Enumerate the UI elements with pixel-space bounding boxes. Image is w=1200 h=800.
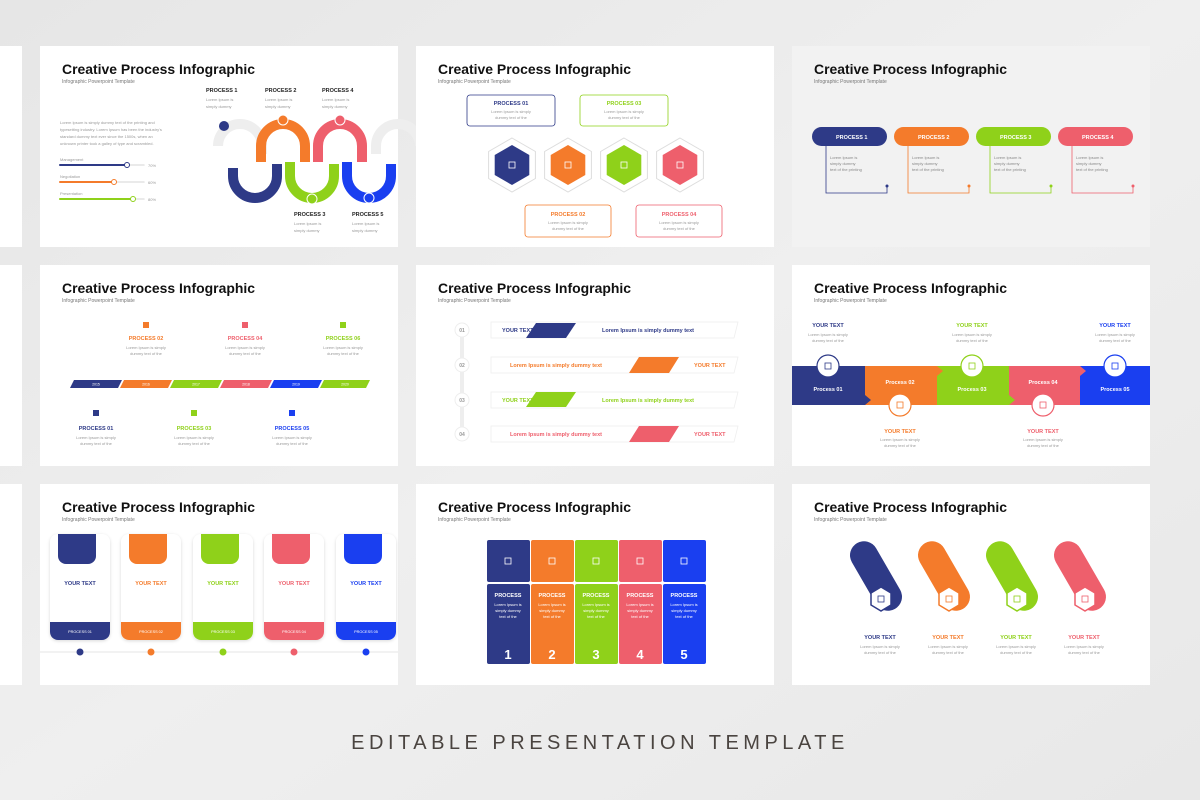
slide 3: process tabs: text of the printing xyxy=(912,167,944,172)
slide 8: puzzle: text of the xyxy=(675,614,694,619)
slide 6: arrow band: Process 02 xyxy=(885,380,915,386)
slide 8: puzzle: simply dummy xyxy=(539,608,565,613)
slide 2: hexagons: dummy text of the xyxy=(608,115,641,120)
slide 2: hexagons: Creative Process Infographic xyxy=(438,61,631,77)
slide 3: process tabs: PROCESS 2 xyxy=(918,135,949,141)
partial slides at left edge xyxy=(0,46,22,685)
slide 4: timeline bars: 2018 xyxy=(242,382,250,386)
slide 8: puzzle xyxy=(416,484,774,685)
slide 1: ring process: simply dummy xyxy=(294,228,320,233)
slide 7: cards: YOUR TEXT xyxy=(135,581,167,587)
slide 4: timeline bars xyxy=(40,265,398,466)
slide 7: cards: PROCESS 02 xyxy=(139,630,163,634)
slide 2: hexagons: Lorem Ipsum is simply xyxy=(548,220,588,225)
slide 7: cards: YOUR TEXT xyxy=(278,581,310,587)
slide 3: process tabs: text of the printing xyxy=(1076,167,1108,172)
slide 3: process tabs: Infographic Powerpoint Template xyxy=(814,79,887,85)
slide 4: timeline bars: dummy text of the xyxy=(80,441,113,446)
slide 8: puzzle: 4 xyxy=(636,647,644,662)
slide 4: timeline bars: 2019 xyxy=(292,382,300,386)
slide 8: puzzle: Lorem Ipsum is xyxy=(582,602,610,607)
slide 6: arrow band: Lorem Ipsum is simply xyxy=(808,332,848,337)
slide 8: puzzle: 5 xyxy=(680,647,688,662)
slide 8: puzzle: Creative Process Infographic xyxy=(438,499,631,515)
slide 8: puzzle: simply dummy xyxy=(627,608,653,613)
slide 1: ring process: simply dummy xyxy=(322,104,348,109)
slide 2: hexagons: dummy text of the xyxy=(663,226,696,231)
slide 8: puzzle: text of the xyxy=(499,614,518,619)
slide 4: timeline bars: PROCESS 06 xyxy=(326,336,360,342)
slide 4: timeline bars: Lorem Ipsum is simply xyxy=(76,435,116,440)
slide 4: timeline bars: 2017 xyxy=(192,382,200,386)
slide 3: process tabs: simply dummy xyxy=(912,161,938,166)
slide 1: ring process: Infographic Powerpoint Template xyxy=(62,79,135,85)
slide 1: ring process: Lorem Ipsum is xyxy=(322,97,349,102)
slide 4: timeline bars: PROCESS 04 xyxy=(228,336,263,342)
slide 3: process tabs: PROCESS 4 xyxy=(1082,135,1114,141)
slide 1: ring process: simply dummy xyxy=(206,104,232,109)
slide 4: timeline bars: Infographic Powerpoint Template xyxy=(62,298,135,304)
slide 4: timeline bars: dummy text of the xyxy=(327,351,360,356)
slide 6: arrow band: YOUR TEXT xyxy=(1027,429,1059,435)
slide 8: puzzle: simply dummy xyxy=(495,608,521,613)
slide 4: timeline bars: Lorem Ipsum is simply xyxy=(272,435,312,440)
slide 7: cards: Infographic Powerpoint Template xyxy=(62,517,135,523)
slide 2: hexagons: Lorem Ipsum is simply xyxy=(604,109,644,114)
slide 8: puzzle: simply dummy xyxy=(671,608,697,613)
slide 1: ring process: Lorem Ipsum is simply dummy text of the printing and xyxy=(60,120,155,125)
slide 6: arrow band: YOUR TEXT xyxy=(956,323,988,329)
slide 3: process tabs: PROCESS 3 xyxy=(1000,135,1031,141)
slide 1: ring process: simply dummy xyxy=(352,228,378,233)
slide 6: arrow band: Process 05 xyxy=(1100,387,1130,393)
slide 6: arrow band: Infographic Powerpoint Template xyxy=(814,298,887,304)
slide 1: ring process: PROCESS 5 xyxy=(352,212,383,218)
slide 8: puzzle: PROCESS xyxy=(495,593,522,599)
slide 4: timeline bars: dummy text of the xyxy=(130,351,163,356)
slide 5: rows list: Lorem Ipsum is simply dummy text xyxy=(602,398,694,404)
slide 5: rows list: 01 xyxy=(459,328,465,334)
slide 8: puzzle: Lorem Ipsum is xyxy=(538,602,566,607)
slide 6: arrow band: YOUR TEXT xyxy=(1099,323,1131,329)
slide 6: arrow band: Creative Process Infographic xyxy=(814,280,1007,296)
slide 8: puzzle: PROCESS xyxy=(539,593,566,599)
slide 7: cards: Creative Process Infographic xyxy=(62,499,255,515)
slide 9: tilted pills: dummy text of the xyxy=(1068,650,1101,655)
slide 2: hexagons: dummy text of the xyxy=(552,226,585,231)
slide 8: puzzle: PROCESS xyxy=(583,593,610,599)
slide 8: puzzle: 2 xyxy=(548,647,556,662)
slide 1: ring process: PROCESS 3 xyxy=(294,212,325,218)
slide 4: timeline bars: Lorem Ipsum is simply xyxy=(225,345,265,350)
slide 5: rows list: 04 xyxy=(459,432,465,438)
slide 2: hexagons: Lorem Ipsum is simply xyxy=(491,109,531,114)
slide 3: process tabs: simply dummy xyxy=(994,161,1020,166)
slide 8: puzzle: Lorem Ipsum is xyxy=(626,602,654,607)
slide 1: ring process: PROCESS 1 xyxy=(206,88,237,94)
slide 4: timeline bars: 2015 xyxy=(92,382,100,386)
slide 4: timeline bars: Creative Process Infographic xyxy=(62,280,255,296)
slide 9: tilted pills: YOUR TEXT xyxy=(1068,635,1100,641)
slide 3: process tabs: Lorem Ipsum is xyxy=(994,155,1021,160)
slide 8: puzzle: text of the xyxy=(587,614,606,619)
slide 9: tilted pills: dummy text of the xyxy=(1000,650,1033,655)
slide 9: tilted pills xyxy=(792,484,1150,685)
slide 7: cards: PROCESS 05 xyxy=(354,630,378,634)
slide 6: arrow band: Process 03 xyxy=(957,387,987,393)
slide 4: timeline bars: 2016 xyxy=(142,382,150,386)
slide 5: rows list: 03 xyxy=(459,398,465,404)
slide 2: hexagons: PROCESS 02 xyxy=(551,212,585,218)
slide 1: ring process: Creative Process Infographic xyxy=(62,61,255,77)
slide 6: arrow band: YOUR TEXT xyxy=(812,323,844,329)
slide 2: hexagons: Infographic Powerpoint Template xyxy=(438,79,511,85)
slide 2: hexagons: PROCESS 04 xyxy=(662,212,697,218)
slide 3: process tabs: Lorem Ipsum is xyxy=(1076,155,1103,160)
slide 6: arrow band: dummy text of the xyxy=(1027,443,1060,448)
slide 2: hexagons xyxy=(416,46,774,247)
slide 9: tilted pills: Creative Process Infographic xyxy=(814,499,1007,515)
slide 1: ring process: Presentation xyxy=(60,191,82,196)
slide 8: puzzle: Infographic Powerpoint Template xyxy=(438,517,511,523)
slide 1: ring process: Lorem Ipsum is xyxy=(294,221,321,226)
slide 1: ring process: typesetting industry. Lorem Ipsum has been the industry's xyxy=(60,127,162,132)
slide 5: rows list: Creative Process Infographic xyxy=(438,280,631,296)
footer heading: EDITABLE PRESENTATION TEMPLATE xyxy=(351,732,849,754)
slide 8: puzzle: text of the xyxy=(631,614,650,619)
slide 1: ring process: 80% xyxy=(148,197,156,202)
slide 1: ring process: 70% xyxy=(148,163,156,168)
slide 7: cards: YOUR TEXT xyxy=(64,581,96,587)
slide 4: timeline bars: Lorem Ipsum is simply xyxy=(323,345,363,350)
slide 9: tilted pills: Lorem Ipsum is simply xyxy=(860,644,900,649)
slide 3: process tabs: simply dummy xyxy=(830,161,856,166)
slide 2: hexagons: PROCESS 03 xyxy=(607,101,641,107)
slide 9: tilted pills: dummy text of the xyxy=(932,650,965,655)
slide 5: rows list: YOUR TEXT xyxy=(694,432,726,438)
slide 2: hexagons: PROCESS 01 xyxy=(494,101,528,107)
slide 3: process tabs: Creative Process Infographic xyxy=(814,61,1007,77)
slide 1: ring process: PROCESS 4 xyxy=(322,88,354,94)
slide 5: rows list: YOUR TEXT xyxy=(694,363,726,369)
slide 5: rows list: YOUR TEXT xyxy=(502,398,534,404)
slide 9: tilted pills: YOUR TEXT xyxy=(864,635,896,641)
slide 6: arrow band: Lorem Ipsum is simply xyxy=(880,437,920,442)
slide 6: arrow band: YOUR TEXT xyxy=(884,429,916,435)
slide 4: timeline bars: dummy text of the xyxy=(229,351,262,356)
slide 4: timeline bars: PROCESS 02 xyxy=(129,336,163,342)
slide 6: arrow band xyxy=(792,265,1150,466)
slide 8: puzzle: simply dummy xyxy=(583,608,609,613)
slide 5: rows list: Lorem Ipsum is simply dummy text xyxy=(510,363,602,369)
slide 1: ring process: standard dummy text ever since the 1500s, when an xyxy=(60,134,153,139)
slide 9: tilted pills: YOUR TEXT xyxy=(932,635,964,641)
slide 6: arrow band: Lorem Ipsum is simply xyxy=(1023,437,1063,442)
slide 1: ring process: 60% xyxy=(148,180,156,185)
slide 6: arrow band: dummy text of the xyxy=(1099,338,1132,343)
slide 5: rows list xyxy=(416,265,774,466)
slide 4: timeline bars: dummy text of the xyxy=(178,441,211,446)
slide 7: cards: PROCESS 04 xyxy=(282,630,306,634)
slide 6: arrow band: Lorem Ipsum is simply xyxy=(1095,332,1135,337)
slide 4: timeline bars: dummy text of the xyxy=(276,441,309,446)
slide 4: timeline bars: PROCESS 05 xyxy=(275,426,309,432)
slide 9: tilted pills: YOUR TEXT xyxy=(1000,635,1032,641)
slide 1: ring process: Management xyxy=(60,157,84,162)
slide 6: arrow band: Lorem Ipsum is simply xyxy=(952,332,992,337)
slide 3: process tabs: PROCESS 1 xyxy=(836,135,867,141)
slide 8: puzzle: PROCESS xyxy=(627,593,654,599)
slide 8: puzzle: 3 xyxy=(592,647,600,662)
slide 4: timeline bars: PROCESS 01 xyxy=(79,426,113,432)
slide 9: tilted pills: Lorem Ipsum is simply xyxy=(928,644,968,649)
slide 1: ring process: Lorem Ipsum is xyxy=(352,221,379,226)
slide 9: tilted pills: dummy text of the xyxy=(864,650,897,655)
slide 8: puzzle: Lorem Ipsum is xyxy=(494,602,522,607)
slide 2: hexagons: Lorem Ipsum is simply xyxy=(659,220,699,225)
slide 5: rows list: Infographic Powerpoint Template xyxy=(438,298,511,304)
slide 5: rows list: Lorem Ipsum is simply dummy text xyxy=(510,432,602,438)
slide 1: ring process: Lorem Ipsum is xyxy=(265,97,292,102)
slide 7: cards: PROCESS 03 xyxy=(211,630,235,634)
slide 7: cards: YOUR TEXT xyxy=(207,581,239,587)
slide 2: hexagons: dummy text of the xyxy=(495,115,528,120)
slide 1: ring process: Lorem Ipsum is xyxy=(206,97,233,102)
slide 3: process tabs: Lorem Ipsum is xyxy=(830,155,857,160)
slide 8: puzzle: 1 xyxy=(504,647,512,662)
slide 7: cards: PROCESS 01 xyxy=(68,630,92,634)
slide 1: ring process: simply dummy xyxy=(265,104,291,109)
slide 1: ring process: unknown printer took a galley of type and scrambled. xyxy=(60,141,154,146)
slide 1: ring process: PROCESS 2 xyxy=(265,88,296,94)
slide 3: process tabs: Lorem Ipsum is xyxy=(912,155,939,160)
slide 8: puzzle: text of the xyxy=(543,614,562,619)
slide 5: rows list: YOUR TEXT xyxy=(502,328,534,334)
slide 5: rows list: Lorem Ipsum is simply dummy text xyxy=(602,328,694,334)
slide 6: arrow band: Process 01 xyxy=(813,387,843,393)
slide 8: puzzle: PROCESS xyxy=(671,593,698,599)
slide 4: timeline bars: PROCESS 03 xyxy=(177,426,211,432)
slide 9: tilted pills: Infographic Powerpoint Template xyxy=(814,517,887,523)
slide 8: puzzle: Lorem Ipsum is xyxy=(670,602,698,607)
slide 6: arrow band: Process 04 xyxy=(1028,380,1058,386)
slide 3: process tabs xyxy=(792,46,1150,247)
slide 7: cards: YOUR TEXT xyxy=(350,581,382,587)
slide 9: tilted pills: Lorem Ipsum is simply xyxy=(996,644,1036,649)
slide 3: process tabs: text of the printing xyxy=(830,167,862,172)
slide 7: cards xyxy=(40,484,398,685)
slide 3: process tabs: text of the printing xyxy=(994,167,1026,172)
slide 4: timeline bars: Lorem Ipsum is simply xyxy=(174,435,214,440)
slide 9: tilted pills: Lorem Ipsum is simply xyxy=(1064,644,1104,649)
slide 6: arrow band: dummy text of the xyxy=(884,443,917,448)
slide 4: timeline bars: 2020 xyxy=(341,382,349,386)
slide 3: process tabs: simply dummy xyxy=(1076,161,1102,166)
slide 1: ring process: Negotiation xyxy=(60,174,80,179)
slide 6: arrow band: dummy text of the xyxy=(956,338,989,343)
slide 4: timeline bars: Lorem Ipsum is simply xyxy=(126,345,166,350)
slide 5: rows list: 02 xyxy=(459,363,465,369)
slide 6: arrow band: dummy text of the xyxy=(812,338,845,343)
slide 1: ring process xyxy=(40,46,420,247)
